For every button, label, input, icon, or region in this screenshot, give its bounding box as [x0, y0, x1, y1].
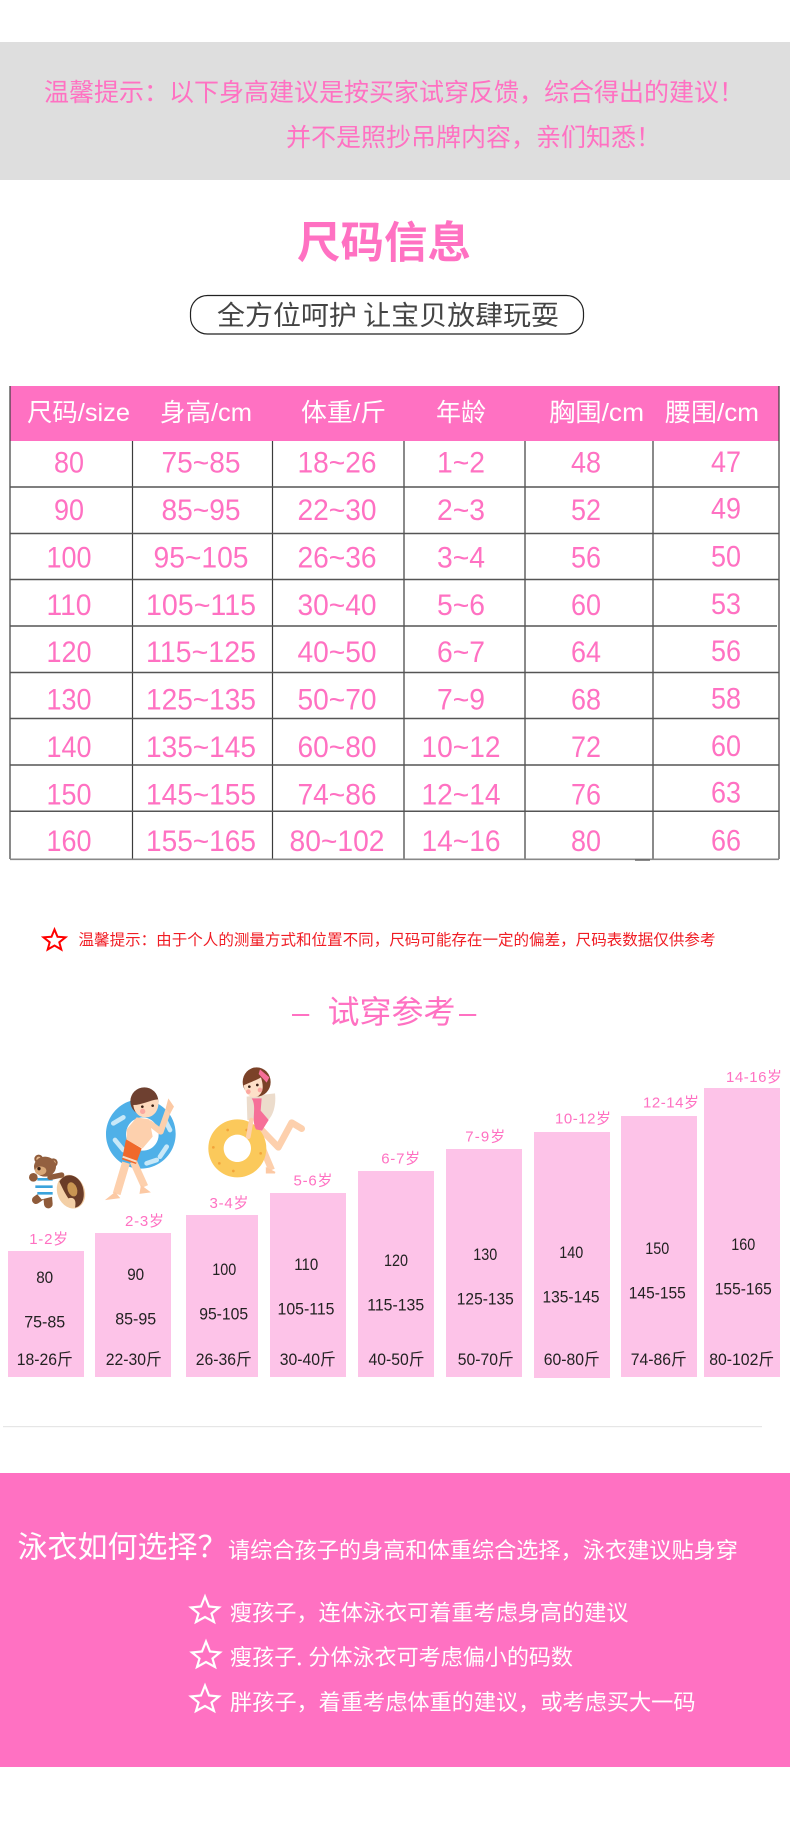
tip 3: 胖孩子，着重考虑体重的建议，或考虑买大一码: [230, 1685, 696, 1717]
bar: 7-9 years: 130: [473, 1246, 497, 1264]
bar: 5-6 years: 5-6岁: [294, 1172, 332, 1190]
bar: 2-3 years: 90: [127, 1266, 144, 1284]
table rows: 30~40: [298, 589, 376, 622]
icon: red star: [44, 930, 66, 950]
bar: 10-12 years: 135-145: [542, 1288, 600, 1306]
bar: 12-14 years: 145-155: [629, 1284, 686, 1302]
table rows: 135~145: [146, 731, 256, 764]
bar: 12-14 years: 74-86斤: [631, 1350, 687, 1369]
table rows: 100: [46, 542, 92, 575]
bar: 12-14 years: 150: [645, 1240, 669, 1258]
table rows: 64: [571, 636, 601, 669]
reminder text line 1: 温馨提示：以下身高建议是按买家试穿反馈，综合得出的建议！: [44, 73, 744, 109]
table header: 身高/cm: [160, 399, 252, 427]
table rows: 12~14: [422, 778, 500, 811]
table rows: 53: [711, 588, 741, 621]
bar: 7-9 years: [446, 1128, 522, 1377]
tip 2: 分体泳衣可考虑偏小的码数: [308, 1640, 573, 1672]
bar: 3-4 years: [186, 1195, 258, 1377]
table rows: 155~165: [146, 825, 256, 858]
bar: 6-7 years: [358, 1150, 434, 1377]
table rows: 48: [571, 446, 601, 480]
bar: 3-4 years: 95-105: [199, 1306, 248, 1324]
table rows: 47: [711, 446, 741, 479]
bar: 10-12 years: 10-12岁: [555, 1110, 611, 1128]
note text: 温馨提示：由于个人的测量方式和位置不同，尺码可能存在一定的偏差，尺码表数据仅供参考: [78, 928, 716, 950]
bar: 14-16 years: 80-102斤: [709, 1350, 774, 1369]
table rows: 75~85: [162, 446, 240, 480]
bar: 1-2 years: 18-26斤: [17, 1350, 73, 1369]
heading: try-on reference: [292, 987, 477, 1033]
bar: 5-6 years: 105-115: [278, 1300, 334, 1318]
table rows: 50: [711, 540, 741, 574]
table rows: 90: [54, 494, 84, 527]
heading: try-on reference: –: [459, 995, 477, 1030]
table rows: 115~125: [146, 636, 256, 669]
table rows: 60: [711, 730, 741, 763]
table header: 腰围/cm: [665, 399, 759, 427]
table rows: 14~16: [422, 825, 500, 858]
illustration: boy with blue swim ring: [106, 1087, 176, 1199]
table rows: 58: [711, 683, 741, 716]
bar: 1-2 years: 80: [36, 1269, 53, 1287]
bar: 2-3 years: 22-30斤: [106, 1350, 162, 1369]
table rows: 26~36: [298, 542, 376, 575]
bar: 14-16 years: 155-165: [715, 1280, 772, 1298]
bar: 7-9 years: 50-70斤: [458, 1350, 514, 1369]
bar: 10-12 years: 140: [559, 1244, 583, 1262]
bar: 12-14 years: [621, 1094, 699, 1377]
table rows: 85~95: [162, 494, 240, 527]
heading: try-on reference: –: [292, 995, 310, 1030]
table rows: 1~2: [437, 446, 485, 480]
bar: 5-6 years: [270, 1172, 346, 1377]
size note with red star: [44, 928, 716, 950]
title: size information: 尺码信息: [297, 208, 471, 271]
bar: 14-16 years: 14-16岁: [726, 1069, 782, 1086]
reminder text line 2: 并不是照抄吊牌内容，亲们知悉！: [286, 118, 661, 154]
table rows: 80~102: [290, 825, 384, 858]
table header: 体重/斤: [301, 399, 386, 427]
table rows: 56: [711, 635, 741, 668]
panel: how to choose swimwear: [0, 1473, 790, 1767]
table rows: 60~80: [298, 731, 376, 764]
table rows: 72: [571, 731, 601, 764]
table rows: 160: [46, 825, 92, 858]
bar: 7-9 years: 7-9岁: [465, 1128, 505, 1146]
table rows: 22~30: [298, 494, 376, 527]
tip 2: 瘦孩子.: [230, 1640, 302, 1672]
table header: 胸围/cm: [549, 399, 644, 427]
table rows: 150: [46, 778, 92, 811]
table rows: 56: [571, 542, 601, 575]
table rows: 5~6: [437, 589, 485, 622]
table rows: 50~70: [298, 683, 376, 716]
table rows: 2~3: [437, 494, 485, 527]
table rows: 125~135: [146, 683, 256, 716]
table rows: 130: [46, 683, 92, 716]
bar: 1-2 years: 75-85: [24, 1314, 65, 1332]
table rows: 80: [571, 825, 601, 858]
table rows: 76: [571, 778, 601, 811]
heading: try-on reference: 试穿参考: [328, 987, 456, 1033]
table rows: 3~4: [437, 542, 485, 575]
bar: 5-6 years: 110: [294, 1256, 318, 1274]
chart: age, size, height and weight bars: [8, 1069, 782, 1378]
bar: 2-3 years: [95, 1213, 171, 1377]
bar: 10-12 years: 60-80斤: [544, 1350, 600, 1369]
bar: 10-12 years: [534, 1110, 611, 1378]
bar: 6-7 years: 40-50斤: [368, 1350, 424, 1369]
table rows: [46, 446, 741, 858]
table rows: 52: [571, 494, 601, 527]
table rows: 66: [711, 824, 741, 857]
table rows: 95~105: [154, 542, 248, 575]
table rows: 6~7: [437, 636, 485, 669]
table rows: 40~50: [298, 636, 376, 669]
panel heading: 泳衣如何选择？: [18, 1522, 228, 1566]
bar: 12-14 years: 12-14岁: [643, 1094, 699, 1112]
table rows: 18~26: [298, 446, 376, 480]
table rows: 120: [46, 636, 92, 669]
illustration: teddy bear with donut: [29, 1155, 90, 1213]
panel: grey reminder banner: [0, 42, 790, 180]
tip 1: 瘦孩子，连体泳衣可着重考虑身高的建议: [230, 1596, 628, 1628]
table rows: 80: [54, 446, 84, 480]
size table: [10, 386, 779, 860]
bar: 1-2 years: [8, 1231, 84, 1377]
bar: 6-7 years: 115-135: [367, 1296, 424, 1314]
table rows: 140: [46, 731, 92, 764]
table rows: 74~86: [298, 778, 376, 811]
bar: 2-3 years: 85-95: [115, 1310, 156, 1328]
bar: 3-4 years: 100: [212, 1261, 236, 1279]
tip 2: [192, 1640, 573, 1672]
table header: 尺码/size: [27, 399, 130, 427]
table rows: 105~115: [146, 589, 256, 622]
illustration: girl with yellow swim ring: [208, 1067, 302, 1177]
bar: 7-9 years: 125-135: [457, 1290, 514, 1308]
table rows: 145~155: [146, 778, 256, 811]
bar: 14-16 years: [704, 1069, 782, 1377]
table header: 年龄: [436, 399, 486, 427]
table rows: 63: [711, 777, 741, 810]
table rows: 110: [46, 589, 92, 622]
bar: 5-6 years: 30-40斤: [280, 1350, 336, 1369]
bar: 1-2 years: 1-2岁: [29, 1231, 68, 1248]
table rows: 68: [571, 683, 601, 716]
bar: 6-7 years: 120: [384, 1252, 408, 1270]
bar: 14-16 years: 160: [731, 1236, 755, 1254]
bar: 3-4 years: 26-36斤: [196, 1350, 252, 1369]
panel intro: 请综合孩子的身高和体重综合选择，泳衣建议贴身穿: [228, 1533, 738, 1565]
table grid: [10, 386, 779, 860]
table rows: 49: [711, 493, 741, 526]
bar: 3-4 years: 3-4岁: [210, 1195, 248, 1212]
table rows: 10~12: [422, 731, 500, 764]
table rows: 60: [571, 589, 601, 622]
bar: 2-3 years: 2-3岁: [125, 1213, 164, 1230]
table rows: 7~9: [437, 683, 485, 716]
pill subtitle: 全方位呵护 让宝贝放肆玩耍: [217, 294, 559, 333]
bar: 6-7 years: 6-7岁: [381, 1150, 420, 1168]
table header: [10, 386, 779, 441]
